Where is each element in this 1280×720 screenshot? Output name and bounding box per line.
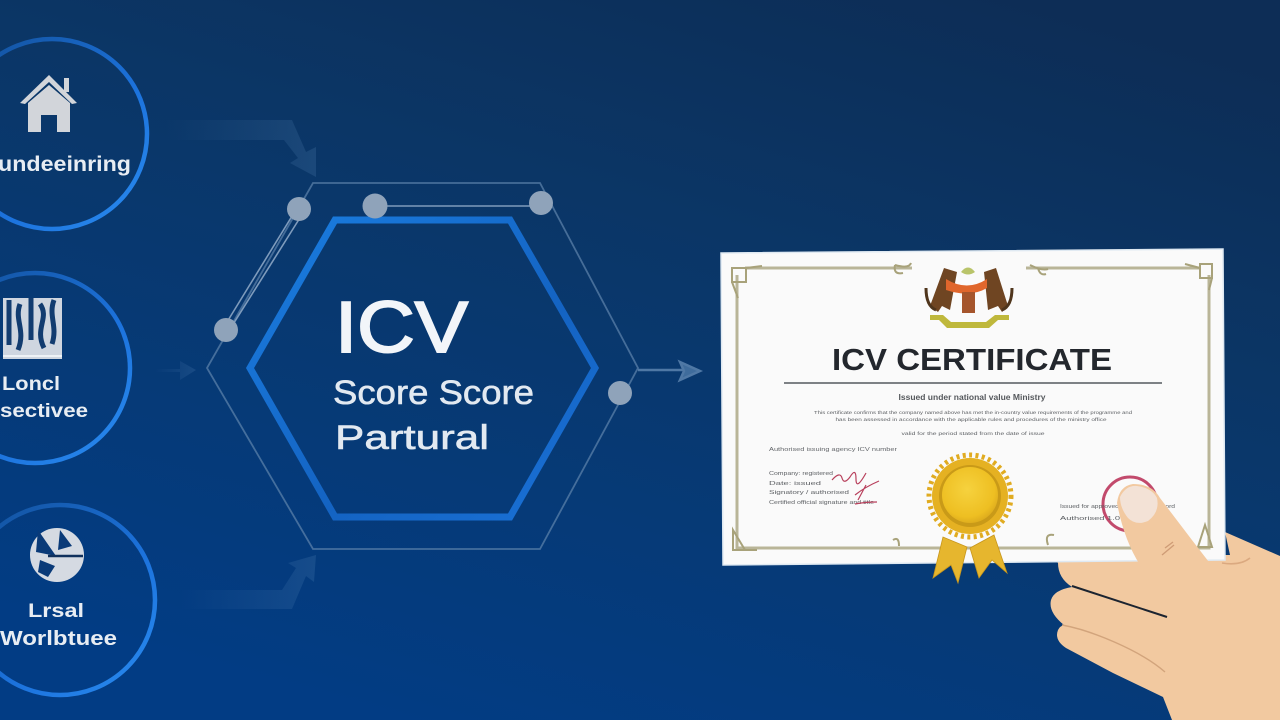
certificate frame [737,268,1209,548]
certificate subtitle: Issued under national value Ministry [898,393,1046,402]
outer hexagon [207,183,638,549]
label: legal: Lrsal [28,601,84,622]
diagram: hexagon network [207,183,638,549]
left signature block: Date: issued [769,481,821,487]
icon: globe [30,528,84,582]
stamp [1103,477,1157,531]
label: workbtuee: Worlbtuee [0,628,117,650]
icon: house [20,75,77,132]
arrow: middle input [155,361,196,380]
circle: legal workbtuee [0,505,155,695]
certificate detail line: Authorised issuing agency ICV number [769,447,897,453]
hand: fingers and palm behind certificate [1050,532,1280,720]
nodes [214,191,632,405]
thumbnail [1120,486,1158,523]
circle: local sectivee [0,273,130,463]
finger lines [1072,586,1167,617]
certificate body: This certificate confirms that the company named above has met the in-country value requirements of the programme and [814,410,1133,415]
left signature block: Company: registered [769,471,833,477]
hexagon subtitle line 2: Partural [335,419,489,457]
title rule [784,382,1162,384]
arrow: top input [165,120,316,177]
circle: undeeinring [0,39,147,229]
left signature block: Certified official signature and title [769,500,874,506]
panel: left input circles [0,39,155,695]
emblem [926,268,1012,328]
certificate title: ICV CERTIFICATE [832,342,1112,377]
gold seal ribbons [933,535,1007,583]
frame ornaments [732,263,1212,550]
hexagon subtitle line 1: Score Score [333,374,534,412]
left signature block: Signatory / authorised [769,490,849,496]
right signature text [1060,504,1175,522]
arrow: bottom input [180,555,316,609]
hand: thumb over certificate [1117,484,1250,640]
right signature text: Authorised 1.0 [1060,516,1120,522]
label: undeeinring: undeeinring [0,153,131,176]
certificate paper [721,249,1225,565]
label: local: Loncl [2,374,60,395]
icon: book and trees [3,298,62,359]
connector lines [227,206,541,326]
right signature text: Issued for approved value office record [1060,504,1175,510]
gold seal [929,455,1011,537]
palm crease [1222,558,1250,564]
certificate body: valid for the period stated from the date of issue [902,431,1045,436]
hexagon title: ICV [335,288,468,368]
thumb crease [1162,542,1174,555]
certificate body: has been assessed in accordance with the applicable rules and procedures of the ministry office [836,417,1107,422]
label: sectivee: sectivee [0,401,88,422]
signature scribble [832,472,879,504]
panel: certificate [721,249,1225,583]
left signature block [769,471,879,506]
inner hexagon [250,220,595,517]
certificate body [814,410,1133,436]
arrow: to certificate [638,362,700,380]
